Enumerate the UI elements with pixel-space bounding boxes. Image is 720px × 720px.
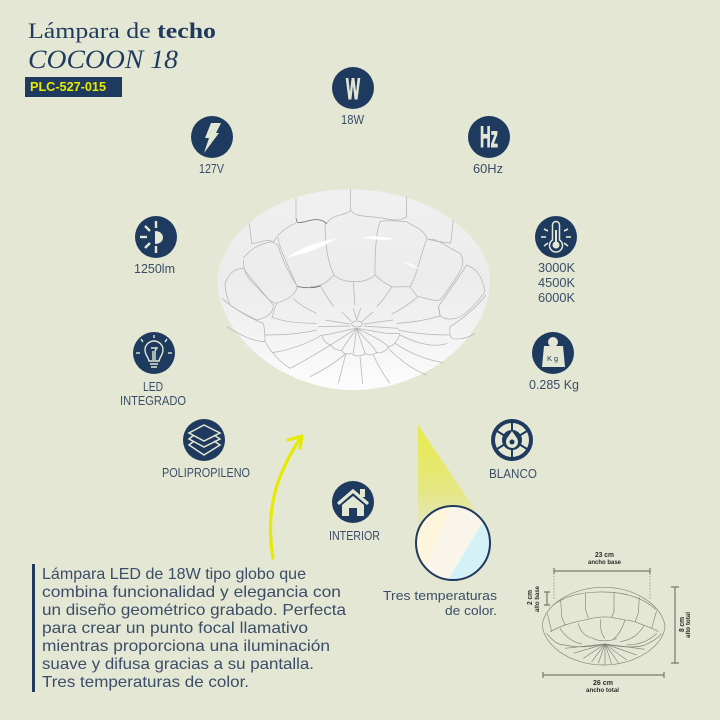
spec: power 18W: 18W xyxy=(341,112,365,127)
spec: colour white: BLANCO xyxy=(489,466,537,481)
spec: weight xyxy=(529,332,579,392)
spec: colour temperature: 4500K xyxy=(538,275,575,290)
spec: material: POLIPROPILENO xyxy=(162,465,250,480)
description block: un diseño geométrico grabado. Perfecta xyxy=(42,602,346,619)
description block: suave y difusa gracias a su pantalla. xyxy=(42,656,314,673)
title: COCOON 18 xyxy=(28,45,178,74)
swatch caption: Tres temperaturas xyxy=(383,588,498,603)
dimension diagram: ancho total xyxy=(586,688,619,694)
spec: colour temperature: 6000K xyxy=(538,290,575,305)
spec: voltage 127V: 127V xyxy=(199,161,224,176)
product code badge xyxy=(25,77,122,97)
spec: integrated LED: LED xyxy=(143,379,163,394)
dimension diagram: 8 cm xyxy=(677,617,686,632)
spec: frequency 60Hz xyxy=(468,116,510,176)
spec: colour white xyxy=(489,419,537,481)
lamp dark accents xyxy=(296,218,327,288)
dimension diagram: 2 cm xyxy=(525,590,534,605)
spec: colour temperature xyxy=(535,216,577,305)
description block: combina funcionalidad y elegancia con xyxy=(42,584,341,601)
dimension diagram: alto total xyxy=(686,612,692,638)
spec: power 18W xyxy=(332,67,374,127)
spec: power 18W: W xyxy=(346,73,360,106)
dimension diagram: 26 cm xyxy=(593,678,613,687)
spec: material xyxy=(162,419,250,480)
title: Lámpara de techo xyxy=(28,18,216,43)
spec: frequency 60Hz: 60Hz xyxy=(473,161,503,176)
colour temperature swatch xyxy=(415,505,491,581)
spec: indoor use xyxy=(329,481,380,543)
product code badge: PLC-527-015 xyxy=(30,80,106,94)
spec: frequency 60Hz: Hz xyxy=(480,121,498,154)
spec: weight: Kg xyxy=(547,354,558,363)
swatch caption xyxy=(383,588,498,618)
description block: Tres temperaturas de color. xyxy=(42,674,249,691)
spec: weight: 0.285 Kg xyxy=(529,377,579,392)
dimension diagram: ancho base xyxy=(588,560,622,566)
description block xyxy=(32,564,346,692)
dimension diagram: 23 cm xyxy=(595,550,614,559)
spec: luminous flux 1250lm xyxy=(134,216,177,276)
title xyxy=(28,18,216,74)
diagram lamp outline xyxy=(542,587,665,665)
dimension diagram: alto base xyxy=(535,585,541,612)
description block: para crear un punto focal llamativo xyxy=(42,620,308,637)
lamp highlights xyxy=(287,236,420,269)
yellow arrow xyxy=(270,436,302,558)
spec: voltage 127V xyxy=(191,116,233,176)
light cone xyxy=(418,425,476,532)
lamp engraved pattern xyxy=(222,189,486,384)
spec: colour temperature: 3000K xyxy=(538,260,575,275)
lamp photo xyxy=(217,189,490,390)
spec: indoor use: INTERIOR xyxy=(329,528,380,543)
spec: luminous flux 1250lm: 1250lm xyxy=(134,261,175,276)
swatch caption: de color. xyxy=(445,603,497,618)
description block: mientras proporciona una iluminación xyxy=(42,638,330,655)
description block: Lámpara LED de 18W tipo globo que xyxy=(42,566,306,583)
spec: integrated LED: INTEGRADO xyxy=(120,393,186,408)
spec: integrated LED xyxy=(120,332,186,408)
dimension diagram xyxy=(525,550,692,694)
